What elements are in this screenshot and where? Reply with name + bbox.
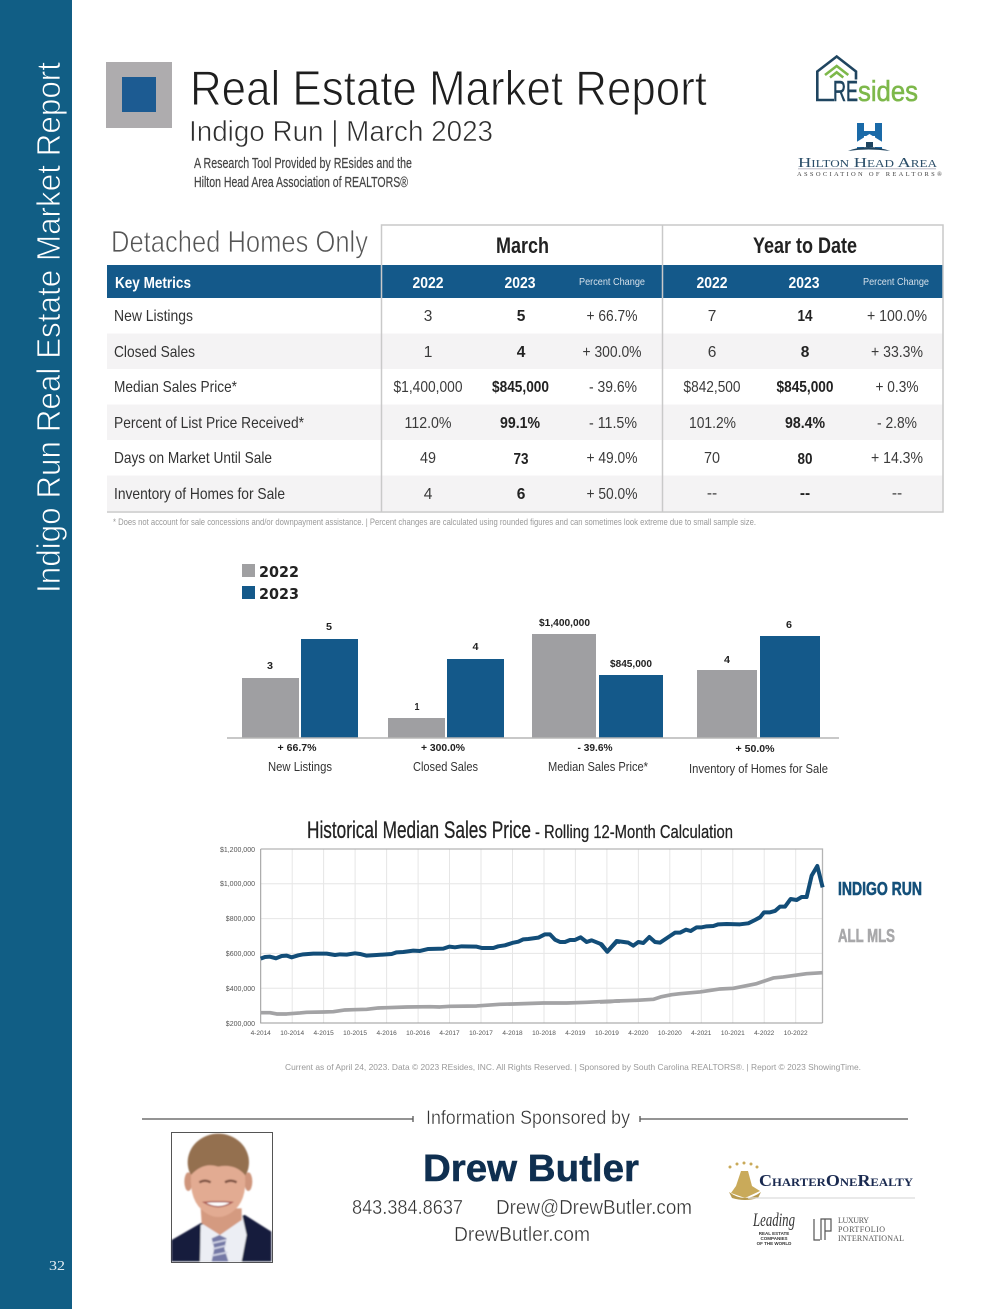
group: inventory of homes for sale: 4 — [724, 654, 730, 666]
row: days on market until sale: Days on Market Until Sale — [114, 450, 272, 467]
x axis labels: 10-2018 — [532, 1030, 556, 1037]
x axis labels: 4-2015 — [313, 1030, 334, 1037]
group: closed sales: + 300.0% — [421, 742, 466, 754]
phone and email: 843.384.8637 — [352, 1197, 463, 1219]
y axis labels: $400,000 — [226, 986, 255, 993]
legend: 2022 — [259, 563, 299, 581]
table header row: Percent Change — [579, 276, 645, 288]
x axis labels: 10-2020 — [658, 1030, 682, 1037]
smile — [204, 1202, 232, 1207]
logo: Hilton Head Area: ASSOCIATION OF REALTORS® — [797, 171, 942, 178]
x axis labels: 4-2018 — [502, 1030, 523, 1037]
phone and email — [352, 1197, 692, 1219]
subtitle: Indigo Run | March 2023 — [189, 116, 493, 148]
sidebar title: Indigo Run Real Estate Market Report — [30, 62, 67, 593]
row: percent of list price received: 101.2% — [689, 415, 736, 432]
face — [191, 1165, 245, 1217]
row: days on market until sale: + 14.3% — [871, 450, 923, 467]
row: closed sales: Closed Sales — [114, 344, 195, 361]
row: new listings: New Listings — [114, 308, 193, 325]
logo: Leading Real Estate Companies: COMPANIES — [761, 1236, 787, 1241]
x axis labels: 4-2014 — [251, 1030, 271, 1037]
footnote: * Does not account for sale concessions and/or downpayment assistance. | Percent changes are calculated using rounded figures and can sometimes look extreme due to small sample size. — [113, 517, 756, 528]
tie — [212, 1235, 228, 1261]
logo: REsides: sides — [858, 76, 918, 108]
row: percent of list price received: 112.0% — [404, 415, 452, 432]
legend — [242, 563, 299, 603]
y axis labels: $200,000 — [226, 1021, 255, 1028]
jacket — [172, 1215, 271, 1261]
row: days on market until sale: 80 — [798, 451, 812, 468]
series label: all mls: ALL MLS — [838, 926, 895, 946]
group: median sales price: Median Sales Price* — [548, 760, 648, 774]
row: percent of list price received: 98.4% — [785, 415, 825, 432]
row: closed sales — [114, 344, 923, 361]
row: closed sales: + 300.0% — [582, 344, 642, 361]
x axis labels: 4-2020 — [628, 1030, 649, 1037]
sponsor heading — [142, 1108, 908, 1129]
logo: Leading Real Estate Companies: OF THE WORLD — [757, 1241, 792, 1246]
row: inventory of homes for sale: Inventory of Homes for Sale — [114, 486, 285, 503]
x axis labels: 4-2021 — [691, 1030, 712, 1037]
neck — [201, 1208, 242, 1235]
logo: Luxury Portfolio International: PORTFOLIO — [838, 1225, 885, 1234]
logo: Luxury Portfolio International: INTERNATIONAL — [838, 1234, 904, 1243]
group: new listings: 5 — [326, 621, 332, 633]
series: indigo run — [261, 866, 823, 959]
y axis labels: $1,000,000 — [220, 881, 255, 888]
group: inventory of homes for sale — [689, 619, 828, 776]
eyes — [199, 1181, 237, 1182]
row: percent of list price received: 99.1% — [500, 415, 540, 432]
row: percent of list price received: Percent of List Price Received* — [114, 415, 304, 432]
y axis labels: $800,000 — [226, 916, 255, 923]
x axis labels: 4-2016 — [376, 1030, 397, 1037]
series: all mls — [261, 973, 823, 1014]
x axis labels: 10-2017 — [469, 1030, 493, 1037]
logo: Leading Real Estate Companies: Leading — [752, 1210, 795, 1231]
row: inventory of homes for sale: -- — [892, 485, 902, 502]
period headings — [496, 233, 857, 258]
y axis labels: $1,200,000 — [220, 847, 255, 854]
row: median sales price: $845,000 — [492, 379, 549, 396]
x axis labels: 10-2016 — [406, 1030, 430, 1037]
table borders — [107, 225, 943, 512]
row: percent of list price received: - 11.5% — [589, 415, 637, 432]
sponsor photo — [172, 1132, 272, 1262]
sponsor contact — [352, 1148, 692, 1246]
row: new listings: 5 — [517, 308, 526, 325]
chart title: Historical Median Sales Price — [307, 817, 531, 844]
row: inventory of homes for sale: -- — [707, 485, 717, 502]
group: new listings: + 66.7% — [278, 742, 317, 754]
row: median sales price: $1,400,000 — [394, 379, 463, 396]
row: median sales price: $842,500 — [684, 379, 741, 396]
row: days on market until sale: 70 — [704, 450, 720, 467]
sidebar — [0, 0, 72, 1309]
row: new listings: + 66.7% — [586, 308, 638, 325]
x axis labels: 10-2021 — [721, 1030, 745, 1037]
row: closed sales: + 33.3% — [871, 344, 923, 361]
website: DrewButler.com — [454, 1224, 590, 1246]
page number: 32 — [49, 1259, 65, 1274]
row: percent of list price received: - 2.8% — [877, 415, 917, 432]
phone and email: Drew@DrewButler.com — [496, 1197, 692, 1219]
x axis labels — [251, 1030, 808, 1037]
group: closed sales: 1 — [414, 701, 420, 713]
row: days on market until sale: 49 — [420, 450, 436, 467]
group: new listings: New Listings — [268, 760, 332, 774]
ears — [184, 1172, 192, 1191]
data source note: Current as of April 24, 2023. Data © 2023 REsides, INC. All Rights Reserved. | Sponsored by South Carolina REALTORS®. | Report © 2023 ShowingTime. — [285, 1062, 861, 1072]
line chart: historical median sales price — [220, 817, 922, 1037]
x axis labels: 10-2022 — [784, 1030, 808, 1037]
x axis labels: 10-2019 — [595, 1030, 619, 1037]
logo: Charter One Realty — [728, 1162, 915, 1200]
legend: 2023 — [259, 585, 299, 603]
row: closed sales: 1 — [424, 344, 432, 361]
row: new listings — [114, 308, 927, 325]
title: Real Estate Market Report — [190, 62, 707, 116]
row: inventory of homes for sale: + 50.0% — [586, 486, 638, 503]
shirt — [200, 1212, 247, 1261]
group: median sales price: - 39.6% — [578, 742, 613, 754]
table header row: 2022 — [412, 275, 444, 292]
group: median sales price — [532, 617, 663, 774]
table header row: 2023 — [788, 275, 820, 292]
sextant icon — [728, 1162, 761, 1200]
logo: Luxury Portfolio International — [814, 1216, 904, 1243]
row: days on market until sale: + 49.0% — [586, 450, 638, 467]
x axis labels: 10-2015 — [343, 1030, 367, 1037]
logo: Leading Real Estate Companies — [752, 1210, 795, 1246]
group: median sales price: $845,000 — [610, 658, 652, 670]
table header row: 2023 — [504, 275, 536, 292]
x axis labels: 4-2022 — [754, 1030, 775, 1037]
logo: Hilton Head Area — [797, 123, 942, 178]
row: inventory of homes for sale — [114, 485, 902, 503]
row: new listings: 3 — [424, 308, 432, 325]
row: new listings: 14 — [798, 308, 813, 325]
logo: Luxury Portfolio International: LUXURY — [838, 1216, 869, 1225]
research tool note: Hilton Head Area Association of REALTORS® — [194, 174, 408, 191]
x axis labels: 4-2019 — [565, 1030, 586, 1037]
x axis labels: 4-2017 — [439, 1030, 460, 1037]
group: inventory of homes for sale: + 50.0% — [736, 743, 775, 755]
period headings: Year to Date — [753, 233, 857, 258]
logo: Leading Real Estate Companies: REAL ESTATE — [759, 1231, 789, 1236]
row: days on market until sale: 73 — [514, 451, 529, 468]
row: closed sales: 8 — [801, 344, 810, 361]
y axis labels: $600,000 — [226, 951, 255, 958]
table header row: 2022 — [696, 275, 728, 292]
sponsor heading: Information Sponsored by — [426, 1108, 630, 1129]
sponsor name: Drew Butler — [423, 1148, 639, 1190]
logo: REsides — [817, 56, 918, 108]
group: inventory of homes for sale: 6 — [786, 619, 792, 631]
table body backgrounds — [107, 334, 943, 511]
series label: indigo run: INDIGO RUN — [838, 879, 922, 899]
row: median sales price: Median Sales Price* — [114, 379, 237, 396]
row: days on market until sale — [114, 450, 923, 468]
period headings: March — [496, 233, 549, 258]
row: new listings: 7 — [708, 308, 716, 325]
table header row — [107, 265, 943, 298]
row: inventory of homes for sale: 6 — [517, 486, 526, 503]
research tool note — [194, 155, 412, 191]
row: inventory of homes for sale: 4 — [424, 486, 433, 503]
row: percent of list price received — [114, 415, 917, 432]
row: new listings: + 100.0% — [867, 308, 927, 325]
group: new listings — [242, 621, 358, 774]
x axis labels: 10-2014 — [280, 1030, 305, 1037]
heading: detached homes only: Detached Homes Only — [111, 224, 368, 259]
chart title: - Rolling 12-Month Calculation — [535, 822, 733, 842]
group: inventory of homes for sale: Inventory of Homes for Sale — [689, 762, 828, 776]
logo: Hilton Head Area: Hilton Head Area — [798, 156, 938, 171]
research tool note: A Research Tool Provided by REsides and the — [194, 155, 412, 172]
row: median sales price: $845,000 — [776, 379, 834, 396]
table header row: Key Metrics — [115, 275, 191, 292]
row: median sales price: + 0.3% — [876, 379, 919, 396]
logo: Charter One Realty: CharterOneRealty — [759, 1171, 913, 1190]
row: closed sales: 6 — [708, 344, 716, 361]
report heading — [189, 62, 707, 191]
hair — [188, 1134, 249, 1191]
logo: REsides: RE — [833, 76, 858, 108]
row: median sales price — [114, 379, 919, 396]
row: inventory of homes for sale: -- — [800, 485, 810, 502]
table header row: Percent Change — [863, 276, 929, 288]
icon: square emblem — [106, 62, 172, 128]
table section — [107, 224, 943, 528]
group: closed sales: 4 — [472, 641, 479, 653]
y axis labels — [220, 847, 255, 1028]
row: closed sales: 4 — [517, 344, 526, 361]
group: closed sales — [388, 641, 504, 774]
row: median sales price: - 39.6% — [589, 379, 637, 396]
group: closed sales: Closed Sales — [413, 760, 478, 774]
group: median sales price: $1,400,000 — [539, 617, 590, 629]
bar chart — [227, 563, 839, 776]
group: new listings: 3 — [267, 660, 273, 672]
